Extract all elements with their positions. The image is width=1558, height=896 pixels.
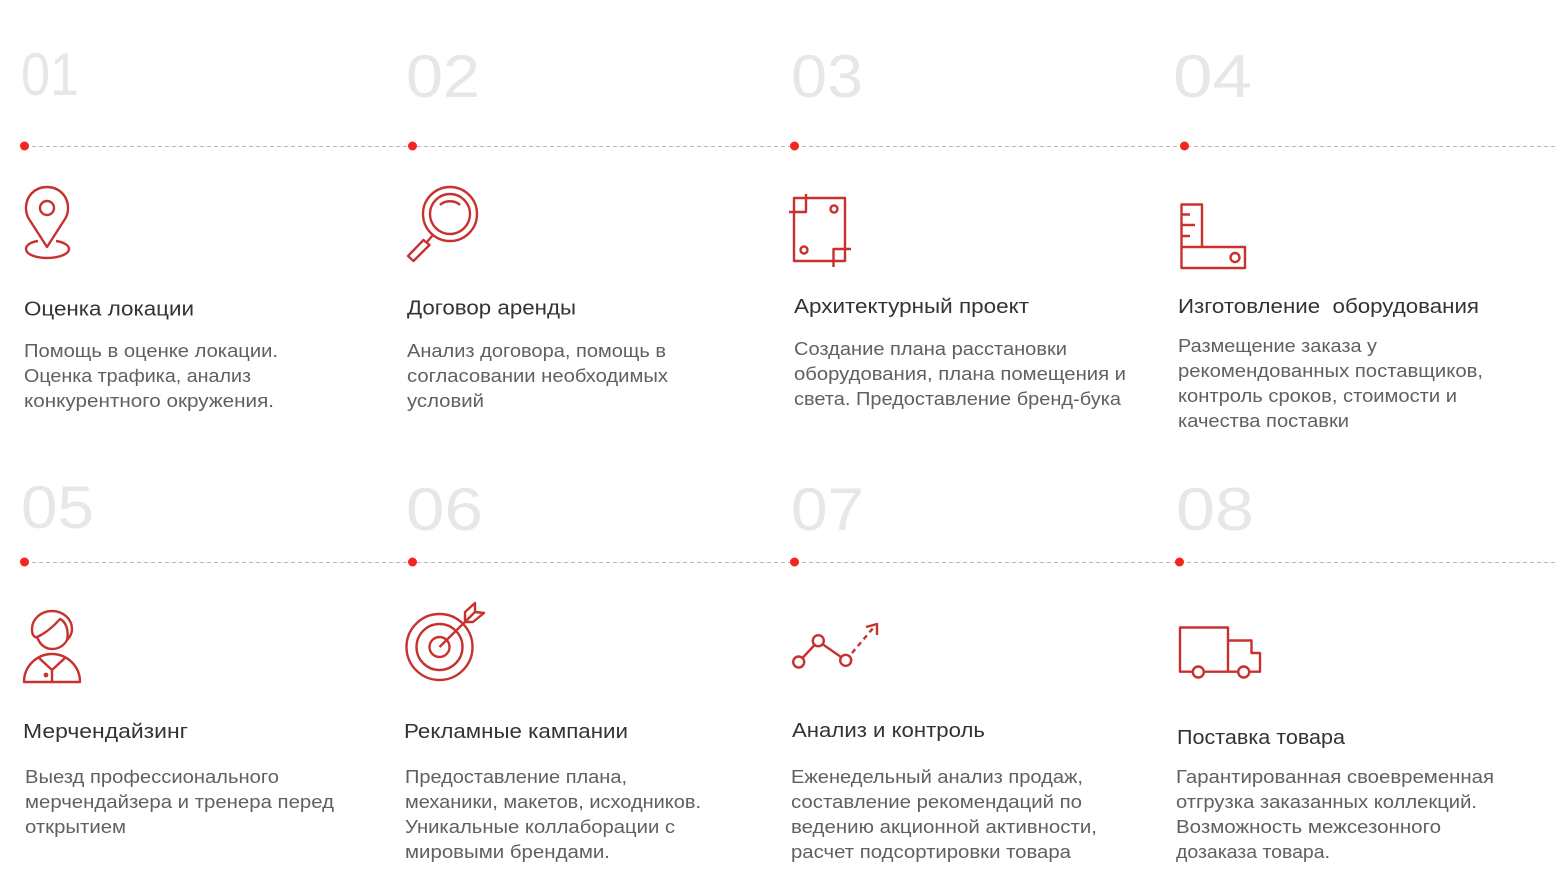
- text block 04: контроль сроков, стоимости и: [1178, 385, 1457, 406]
- text block 08: [1176, 766, 1494, 862]
- text block 03: света. Предоставление бренд-бука: [794, 388, 1122, 409]
- number 07: 07: [791, 476, 864, 543]
- text block 07: составление рекомендаций по: [791, 791, 1082, 812]
- heading 04: Изготовление оборудования: [1178, 296, 1479, 318]
- icon: merchandiser: [24, 611, 80, 682]
- icon: truck: [1180, 628, 1260, 678]
- number 01: 01: [21, 41, 79, 108]
- icon: map pin: [26, 187, 69, 258]
- timeline dot 01: [20, 142, 29, 150]
- heading 05: Мерчендайзинг: [23, 721, 188, 743]
- timeline dot 05: [20, 558, 29, 566]
- number 04: 04: [1173, 43, 1252, 110]
- panel: step 02 lease agreement: [406, 43, 669, 411]
- text block 02: условий: [407, 390, 484, 411]
- number 06: 06: [406, 476, 483, 543]
- text block 01: [24, 340, 278, 411]
- timeline dot 08: [1175, 558, 1184, 566]
- panel: step 06 advertising campaigns: [404, 476, 701, 862]
- text block 06: механики, макетов, исходников.: [405, 791, 701, 812]
- text block 07: ведению акционной активности,: [791, 816, 1097, 837]
- text block 04: качества поставки: [1178, 410, 1349, 431]
- text block 07: [791, 766, 1097, 862]
- text block 08: Возможность межсезонного: [1176, 816, 1441, 837]
- timeline dot 06: [408, 558, 417, 566]
- text block 05: [25, 766, 334, 837]
- text block 05: открытием: [25, 816, 126, 837]
- panel: step 04 equipment manufacturing: [1173, 43, 1483, 431]
- number 08: 08: [1176, 476, 1254, 543]
- number 05: 05: [21, 474, 94, 541]
- text block 05: мерчендайзера и тренера перед: [25, 791, 334, 812]
- text block 01: конкурентного окружения.: [24, 390, 274, 411]
- heading 06: Рекламные кампании: [404, 721, 628, 743]
- text block 05: Выезд профессионального: [25, 766, 279, 787]
- icon: trend line: [793, 624, 877, 668]
- panel: step 03 architecture project: [789, 43, 1126, 409]
- text block 06: мировыми брендами.: [405, 841, 610, 862]
- heading 07: Анализ и контроль: [792, 720, 985, 742]
- text block 04: Размещение заказа у: [1178, 335, 1378, 356]
- panel: step 08 product delivery: [1175, 476, 1494, 862]
- text block 02: Анализ договора, помощь в: [407, 340, 666, 361]
- panel: step 01 location assessment: [20, 41, 278, 411]
- text block 02: [407, 340, 669, 411]
- icon: target with arrow: [406, 603, 484, 680]
- text block 06: Предоставление плана,: [405, 766, 627, 787]
- icon: magnifier: [408, 187, 477, 261]
- panel: step 07 analysis and control: [790, 476, 1097, 862]
- text block 08: отгрузка заказанных коллекций.: [1176, 791, 1477, 812]
- text block 04: рекомендованных поставщиков,: [1178, 360, 1483, 381]
- timeline dot 02: [408, 142, 417, 150]
- text block 01: Помощь в оценке локации.: [24, 340, 278, 361]
- heading 08: Поставка товара: [1177, 727, 1346, 749]
- text block 06: [405, 766, 701, 862]
- number 02: 02: [406, 43, 480, 110]
- timeline dot 07: [790, 558, 799, 566]
- text block 08: Гарантированная своевременная: [1176, 766, 1494, 787]
- heading 03: Архитектурный проект: [794, 296, 1029, 318]
- timeline dot 04: [1180, 142, 1189, 150]
- text block 08: дозаказа товара.: [1176, 841, 1330, 862]
- panel: step 05 merchandising: [20, 474, 334, 837]
- text block 04: [1178, 335, 1483, 431]
- number 03: 03: [791, 43, 863, 110]
- text block 01: Оценка трафика, анализ: [24, 365, 251, 386]
- heading 01: Оценка локации: [24, 298, 194, 320]
- text block 03: оборудования, плана помещения и: [794, 363, 1126, 384]
- icon: floor plan: [789, 194, 851, 267]
- heading 02: Договор аренды: [407, 298, 576, 320]
- text block 02: согласовании необходимых: [407, 365, 669, 386]
- icon: ruler: [1182, 204, 1245, 268]
- text block 06: Уникальные коллаборации с: [405, 816, 675, 837]
- text block 03: Создание плана расстановки: [794, 338, 1067, 359]
- text block 03: [794, 338, 1126, 409]
- text block 07: расчет подсортировки товара: [791, 841, 1072, 862]
- text block 07: Еженедельный анализ продаж,: [791, 766, 1083, 787]
- timeline dot 03: [790, 142, 799, 150]
